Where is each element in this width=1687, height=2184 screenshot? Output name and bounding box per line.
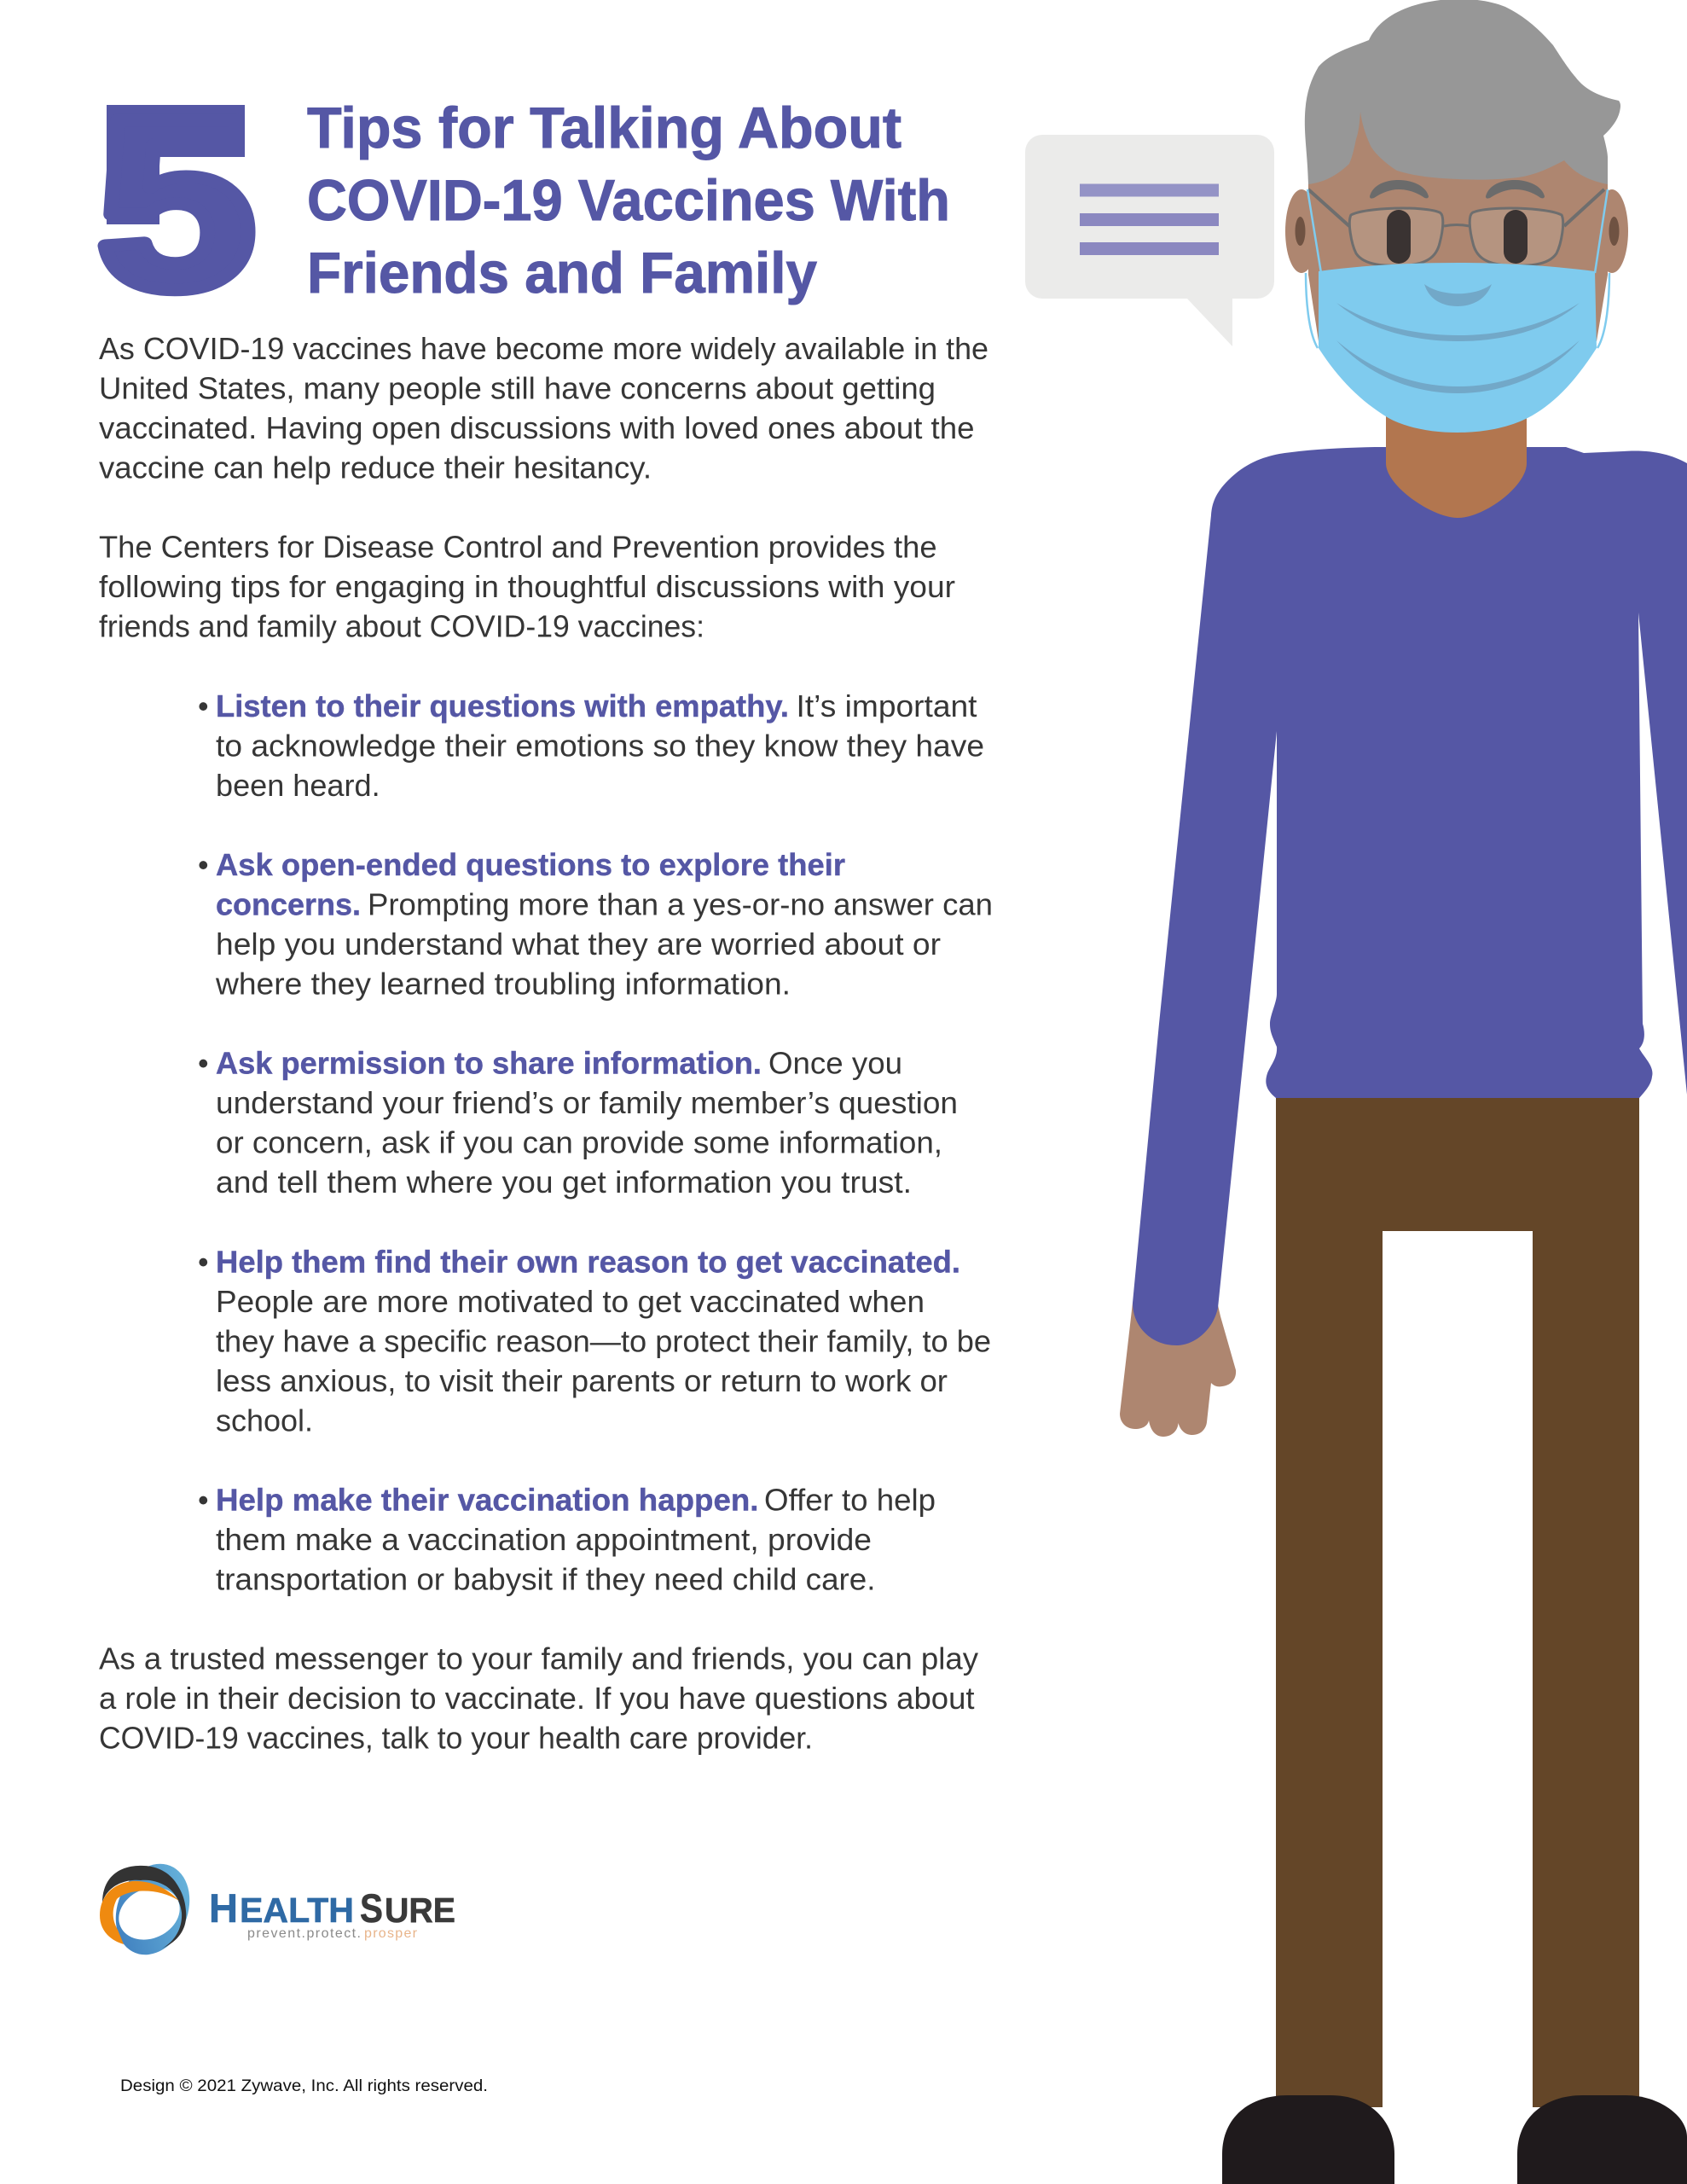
sweater bbox=[1133, 447, 1687, 1345]
tip 3: and tell them where you get information you trust. bbox=[216, 1165, 912, 1199]
speech bubble bbox=[1025, 135, 1274, 346]
tip 5: transportation or babysit if they need child care. bbox=[216, 1561, 875, 1597]
closing paragraph: a role in their decision to vaccinate. If you have questions about bbox=[99, 1681, 974, 1716]
right shoe bbox=[1517, 2095, 1687, 2184]
tip 5: them make a vaccination appointment, provide bbox=[216, 1522, 872, 1557]
big number 5: 5 bbox=[96, 68, 256, 340]
logo wordmark: EALTH bbox=[240, 1891, 354, 1930]
tip 4 bbox=[198, 1244, 991, 1438]
tip 4: school. bbox=[216, 1403, 313, 1438]
tip 4: Help them find their own reason to get vaccinated. bbox=[216, 1244, 960, 1279]
tip 1: It’s important bbox=[797, 688, 977, 723]
tip 5: • bbox=[198, 1483, 209, 1517]
logo rings bbox=[100, 1853, 203, 1966]
trousers bbox=[1276, 1092, 1639, 2107]
logo wordmark: URE bbox=[385, 1891, 455, 1930]
copyright footer: Design © 2021 Zywave, Inc. All rights reserved. bbox=[120, 2077, 488, 2095]
hair bbox=[1305, 0, 1620, 184]
title bbox=[307, 96, 950, 305]
logo wordmark: H bbox=[209, 1885, 238, 1931]
face mask bbox=[1319, 263, 1597, 433]
tip 1: to acknowledge their emotions so they know they have bbox=[216, 728, 984, 763]
tip 1 bbox=[198, 688, 984, 803]
tip 1: been heard. bbox=[216, 768, 380, 803]
title: Tips for Talking About bbox=[307, 96, 901, 160]
hand bbox=[1120, 1303, 1236, 1437]
logo: HealthSure bbox=[100, 1853, 455, 1966]
tip 2: concerns. bbox=[216, 886, 361, 921]
tip 3: Ask permission to share information. bbox=[216, 1046, 762, 1081]
tip 2: Prompting more than a yes-or-no answer can bbox=[368, 886, 993, 921]
title: Friends and Family bbox=[307, 241, 817, 305]
logo tagline: prevent.protect. bbox=[247, 1926, 361, 1941]
closing paragraph: As a trusted messenger to your family and friends, you can play bbox=[99, 1641, 978, 1676]
tip 3: Once you bbox=[768, 1046, 902, 1081]
glasses bbox=[1308, 189, 1604, 265]
tip 1: • bbox=[198, 688, 209, 723]
tip 4: less anxious, to visit their parents or return to work or bbox=[216, 1363, 948, 1398]
intro paragraph bbox=[99, 331, 988, 485]
logo tagline bbox=[247, 1926, 418, 1941]
illustration: man wearing mask bbox=[1120, 0, 1687, 2184]
tip 5: Help make their vaccination happen. bbox=[216, 1483, 759, 1517]
left ear bbox=[1285, 189, 1318, 273]
second paragraph: The Centers for Disease Control and Prevention provides the bbox=[99, 530, 936, 565]
intro paragraph: United States, many people still have concerns about getting bbox=[99, 370, 936, 406]
second paragraph: following tips for engaging in thoughtful discussions with your bbox=[99, 569, 955, 604]
tip 3: understand your friend’s or family member’s question bbox=[216, 1085, 958, 1120]
tip 4: People are more motivated to get vaccinated when bbox=[216, 1284, 925, 1319]
tip 2: help you understand what they are worried about or bbox=[216, 926, 941, 961]
tip 3: or concern, ask if you can provide some information, bbox=[216, 1125, 942, 1160]
tip 2: • bbox=[198, 847, 209, 882]
logo tagline: prosper bbox=[364, 1926, 418, 1941]
tip 1: Listen to their questions with empathy. bbox=[216, 688, 789, 723]
eyes bbox=[1387, 210, 1528, 264]
tip 5: Offer to help bbox=[764, 1483, 936, 1517]
tip 2: Ask open-ended questions to explore their bbox=[216, 847, 845, 882]
tip 2: where they learned troubling information. bbox=[215, 966, 791, 1002]
intro paragraph: vaccinated. Having open discussions with loved ones about the bbox=[99, 410, 974, 445]
left shoe bbox=[1222, 2095, 1394, 2184]
intro paragraph: vaccine can help reduce their hesitancy. bbox=[99, 450, 652, 485]
second paragraph: friends and family about COVID-19 vaccines: bbox=[99, 609, 704, 644]
eyebrows bbox=[1370, 180, 1545, 199]
intro paragraph: As COVID-19 vaccines have become more widely available in the bbox=[99, 331, 988, 366]
tip 5 bbox=[198, 1483, 936, 1597]
mask straps bbox=[1306, 189, 1609, 348]
tip 4: • bbox=[198, 1244, 209, 1279]
closing paragraph: COVID-19 vaccines, talk to your health care provider. bbox=[99, 1721, 813, 1756]
right ear bbox=[1596, 189, 1628, 273]
tip 3 bbox=[198, 1046, 958, 1199]
face bbox=[1308, 107, 1608, 341]
mask folds and nose bbox=[1336, 284, 1580, 393]
tip 2 bbox=[198, 847, 993, 1002]
logo wordmark bbox=[209, 1885, 455, 1931]
title: COVID-19 Vaccines With bbox=[307, 168, 950, 233]
logo wordmark: S bbox=[360, 1885, 383, 1931]
neck bbox=[1386, 401, 1527, 518]
closing paragraph bbox=[99, 1641, 978, 1756]
tip 3: • bbox=[198, 1046, 209, 1081]
tip 4: they have a specific reason—to protect their family, to be bbox=[216, 1323, 991, 1358]
second paragraph bbox=[99, 530, 955, 644]
